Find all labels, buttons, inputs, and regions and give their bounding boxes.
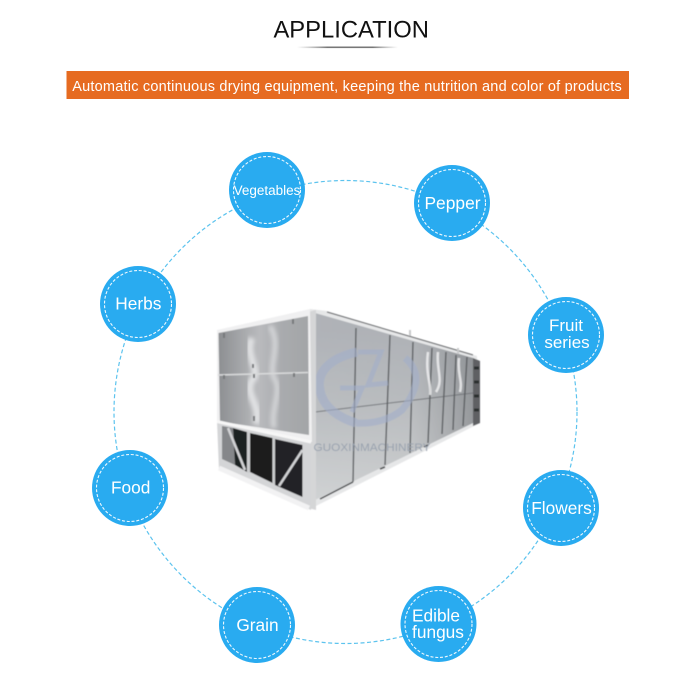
machine front upper panel <box>217 309 312 442</box>
bubble: Grain: Grain <box>236 615 279 635</box>
bubble: Vegetables <box>229 152 305 228</box>
machine air inlet <box>217 421 311 510</box>
bubble: Food <box>92 450 168 526</box>
bubble: Vegetables: Vegetables <box>234 183 301 198</box>
bubble: Pepper <box>414 165 490 241</box>
bubble: Flowers <box>523 470 599 546</box>
bubble: Food: Food <box>111 478 150 498</box>
title underline <box>297 46 398 48</box>
dashed connecting ring <box>114 180 577 644</box>
bubble: Flowers: Flowers <box>531 498 592 518</box>
orange banner: Automatic continuous drying equipment, keeping the nutrition and color of products <box>72 79 622 95</box>
bubble: Fruit series <box>528 297 604 373</box>
bubble: Fruit series: series <box>544 333 590 352</box>
orange banner <box>66 71 629 99</box>
bubble: Edible fungus: fungus <box>412 622 464 642</box>
bubble: Edible fungus: Edible <box>412 606 460 626</box>
machine illustration: continuous dryer <box>217 309 480 510</box>
bubble: Edible fungus <box>400 586 476 662</box>
bubble: Herbs <box>100 266 176 342</box>
bubble: Herbs: Herbs <box>115 294 162 314</box>
bubble: Grain <box>219 587 295 663</box>
bubble: Pepper: Pepper <box>424 193 481 213</box>
title: APPLICATION <box>273 16 429 44</box>
bubble: Fruit series: Fruit <box>549 316 583 335</box>
machine side panels <box>310 309 480 509</box>
machine watermark text: GUOXINMACHINERY <box>314 442 431 454</box>
machine watermark logo <box>319 352 416 423</box>
machine front post <box>308 310 316 510</box>
